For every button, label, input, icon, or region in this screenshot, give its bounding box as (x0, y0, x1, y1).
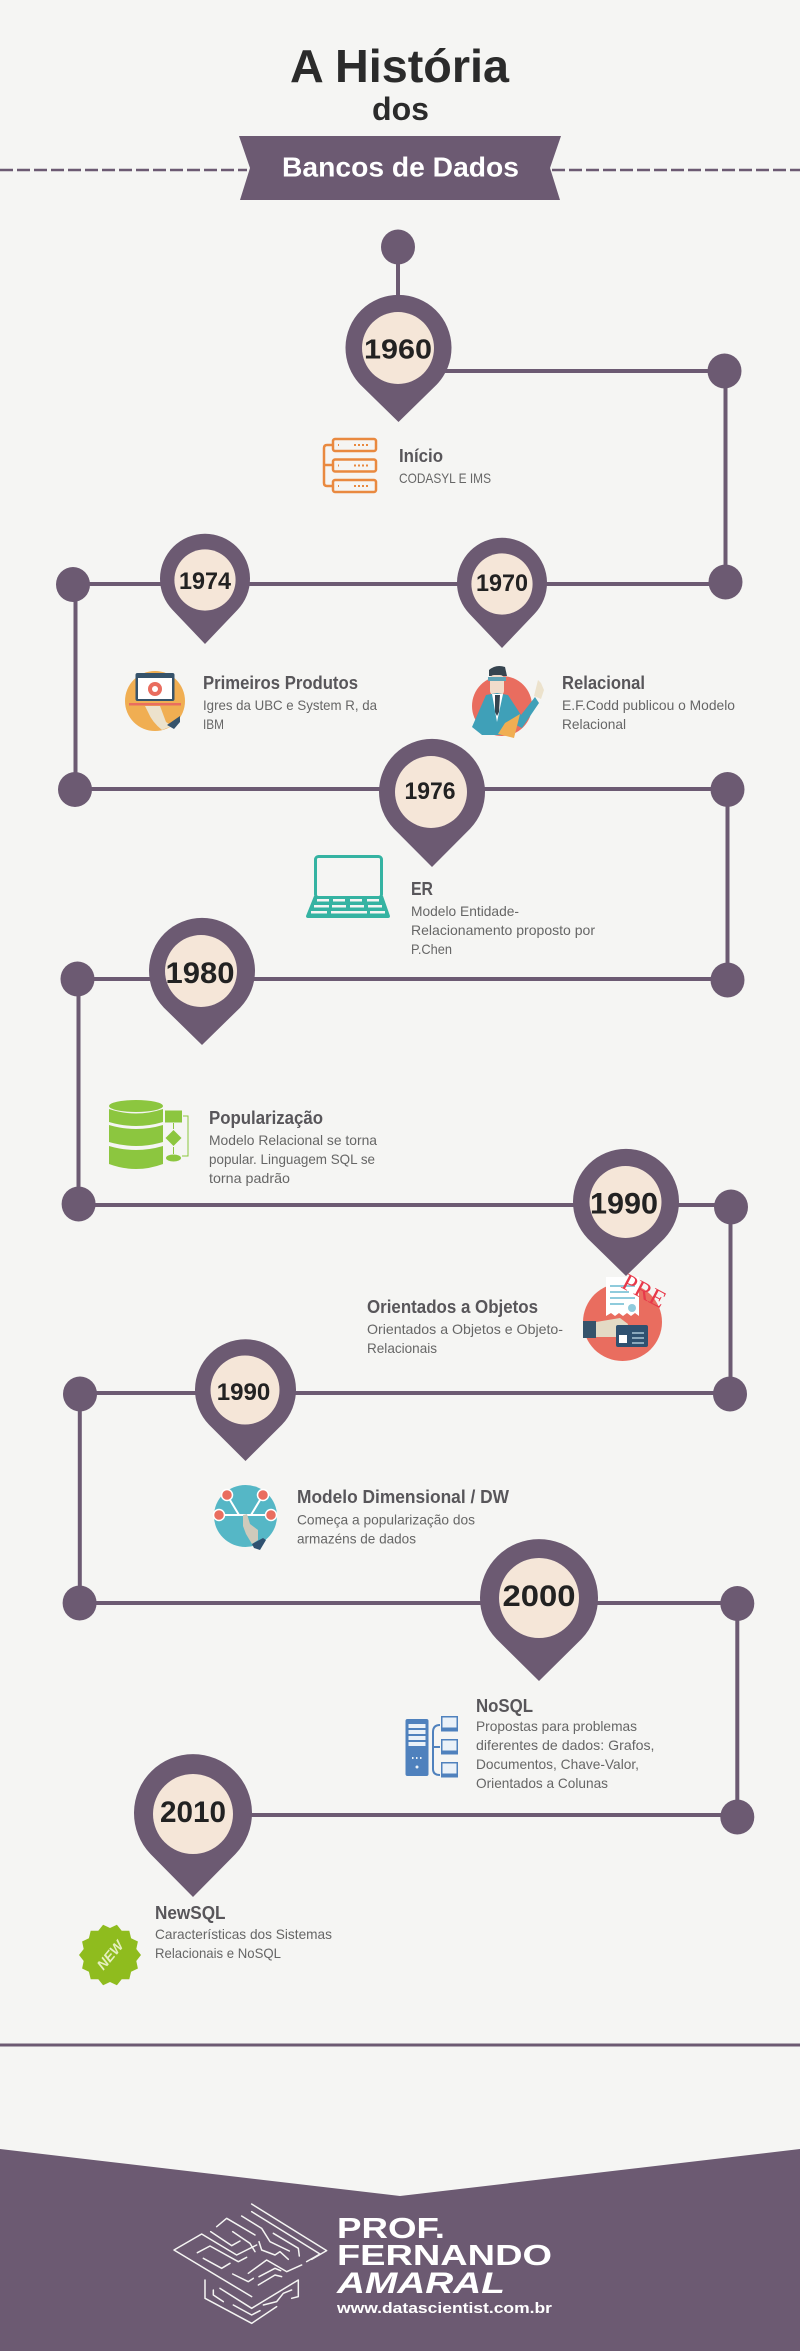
text: description: Orientados a Colunas (476, 1775, 608, 1791)
header (0, 40, 800, 200)
text: description: Características dos Sistemas (155, 1926, 332, 1942)
text: description (562, 697, 735, 732)
text: description: Relacionais (367, 1340, 437, 1356)
text: description: armazéns de dados (297, 1530, 416, 1546)
text: description (297, 1512, 475, 1546)
pin 2010: 2010 (160, 1796, 226, 1829)
text: description: torna padrão (209, 1170, 290, 1186)
logo: circuit diamond (174, 2204, 327, 2323)
text: description: Orientados a Objetos e Objeto- (367, 1321, 563, 1337)
text: description: Relacional (562, 716, 626, 732)
icon: server with computers (406, 1716, 458, 1778)
icon: NEW badge: NEW (93, 1936, 128, 1973)
text: description (209, 1132, 377, 1186)
heading: NoSQL: NoSQL (476, 1696, 533, 1716)
logo text: name: FERNANDO (337, 2240, 552, 2272)
milestone: 1990 Modelo Dimensional (195, 1339, 509, 1550)
logo text: name: AMARAL (336, 2267, 505, 2300)
pin 1980: 1980 (166, 957, 234, 990)
pin 1970: 1970 (476, 570, 528, 597)
pin 1980 (149, 918, 255, 1045)
timeline connector (56, 230, 754, 1834)
icon: green database with flowchart (109, 1100, 188, 1169)
text: CODASYL E IMS: CODASYL E IMS (399, 470, 491, 486)
milestone: 1960 Início (324, 295, 491, 492)
closing divider (0, 2044, 800, 2046)
text: description: popular. Linguagem SQL se (209, 1151, 375, 1167)
text: description: Relacionais e NoSQL (155, 1945, 281, 1961)
pin 1974 (160, 534, 250, 644)
pin 2010 (134, 1754, 252, 1897)
text: description (203, 697, 377, 732)
pin 1960: 1960 (364, 334, 432, 364)
icon: receipt and card payment: PRE (617, 1269, 670, 1314)
dashed rule left (0, 169, 247, 171)
heading: Início: Início (399, 446, 443, 466)
text: description: Modelo Entidade- (411, 903, 519, 919)
pin 1990: 1990 (217, 1379, 270, 1406)
text: description (367, 1321, 563, 1356)
icon: server hierarchy (324, 439, 376, 492)
text: description: Relacionamento proposto por (411, 922, 595, 938)
pin 1976: 1976 (404, 778, 456, 805)
text: description: Propostas para problemas (476, 1718, 637, 1734)
icon: businessman (472, 666, 544, 738)
text: description: P.Chen (411, 941, 452, 957)
title: A História (290, 40, 509, 92)
pin 1990 (195, 1339, 296, 1461)
pin 1976 (379, 739, 485, 867)
banner (239, 136, 561, 200)
text: description: Documentos, Chave-Valor, (476, 1756, 639, 1772)
text: description: diferentes de dados: Grafos, (476, 1737, 654, 1753)
heading: ER: ER (411, 879, 433, 899)
logo text: name (336, 2213, 552, 2300)
dashed rule right (552, 169, 800, 171)
icon: NEW badge (79, 1925, 141, 1985)
heading: Modelo Dimensional / DW: Modelo Dimensional / DW (297, 1487, 509, 1507)
heading: NewSQL: NewSQL (155, 1903, 226, 1923)
subtitle: dos: dos (372, 91, 429, 127)
text: description: Modelo Relacional se torna (209, 1132, 377, 1148)
pin 1990: 1990 (590, 1188, 658, 1220)
pin 1960 (346, 295, 452, 422)
milestone: 1980 Popularização (109, 918, 377, 1186)
milestone: 2010 NewSQL (79, 1754, 332, 1985)
pin 1990 (573, 1149, 679, 1276)
milestone: 2000 NoSQL (406, 1539, 654, 1791)
logo text: name: PROF. (337, 2213, 445, 2245)
milestone: 1974 Primeiros Produtos (125, 534, 377, 732)
icon: web browser on tray (125, 671, 185, 731)
logo text: website: www.datascientist.com.br (336, 2300, 552, 2317)
icon: network touch (214, 1485, 277, 1550)
icon: receipt and card payment (583, 1269, 670, 1361)
pin 2000: 2000 (502, 1580, 576, 1613)
pin 2000 (480, 1539, 598, 1681)
heading: Relacional: Relacional (562, 673, 645, 693)
banner text: Bancos de Dados (282, 152, 519, 182)
milestone: 1970 Relacional (457, 538, 735, 738)
pin 1974: 1974 (179, 568, 232, 595)
footer band (0, 2149, 800, 2351)
text: description (476, 1718, 654, 1791)
heading: Primeiros Produtos: Primeiros Produtos (203, 673, 358, 693)
text: description (411, 903, 595, 957)
text: description (155, 1926, 332, 1961)
text: description: E.F.Codd publicou o Modelo (562, 697, 735, 713)
text: description: Igres da UBC e System R, da (203, 697, 377, 713)
text: description: IBM (203, 716, 224, 732)
heading: Popularização: Popularização (209, 1108, 323, 1128)
icon: laptop (306, 856, 390, 918)
milestone: 1990 Orientados a Objetos (367, 1149, 679, 1361)
milestone: 1976 ER (306, 739, 595, 957)
pin 1970 (457, 538, 547, 648)
footer (0, 2149, 800, 2351)
text: description: Começa a popularização dos (297, 1512, 475, 1528)
heading: Orientados a Objetos: Orientados a Objetos (367, 1297, 538, 1317)
